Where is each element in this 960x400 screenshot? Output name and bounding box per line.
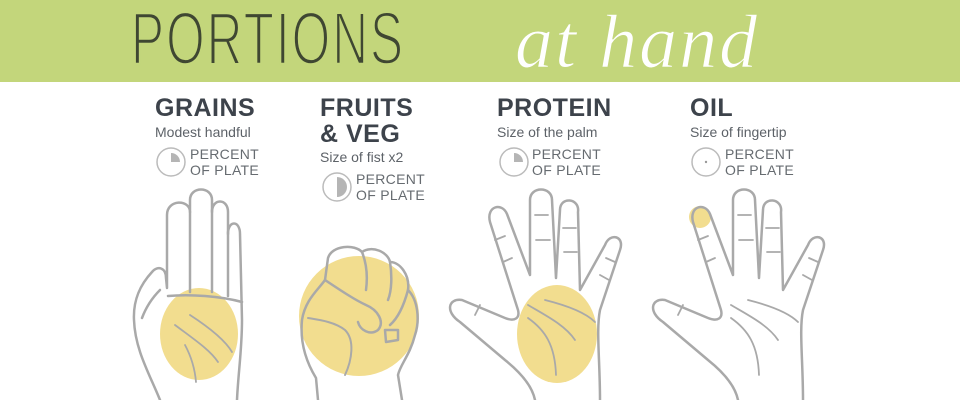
icon: oil plate (692, 148, 720, 176)
heading: oil: OIL (690, 94, 733, 122)
heading: fruits & veg: & VEG (320, 120, 400, 148)
hand: fist (299, 247, 419, 400)
icon: protein plate (500, 148, 528, 176)
label: grains percent (190, 146, 259, 178)
label: fruits percent (356, 171, 425, 203)
heading: fruits & veg: FRUITS (320, 94, 413, 122)
hand: oil (653, 190, 824, 400)
heading: protein: PROTEIN (497, 94, 612, 122)
subtext: oil: Size of fingertip (690, 124, 786, 140)
label: oil percent: PERCENT (725, 146, 794, 162)
icon: fruits plate (323, 173, 351, 201)
label: grains percent: OF PLATE (190, 162, 259, 178)
label: grains percent: PERCENT (190, 146, 259, 162)
label: fruits percent: OF PLATE (356, 187, 425, 203)
heading: fruits & veg (320, 94, 413, 148)
label: protein percent: PERCENT (532, 146, 601, 162)
label: oil percent: OF PLATE (725, 162, 794, 178)
subtext: grains: Modest handful (155, 124, 251, 140)
title script: at hand (515, 0, 759, 84)
header band (0, 0, 960, 82)
label: protein percent: OF PLATE (532, 162, 601, 178)
subtext: fruits: Size of fist x2 (320, 149, 403, 165)
heading: grains: GRAINS (155, 94, 255, 122)
hand: grains (134, 190, 242, 400)
icon: grains plate (157, 148, 185, 176)
hand: protein (450, 190, 621, 400)
label: fruits percent: PERCENT (356, 171, 425, 187)
label: oil percent (725, 146, 794, 178)
subtext: protein: Size of the palm (497, 124, 597, 140)
label: protein percent (532, 146, 601, 178)
